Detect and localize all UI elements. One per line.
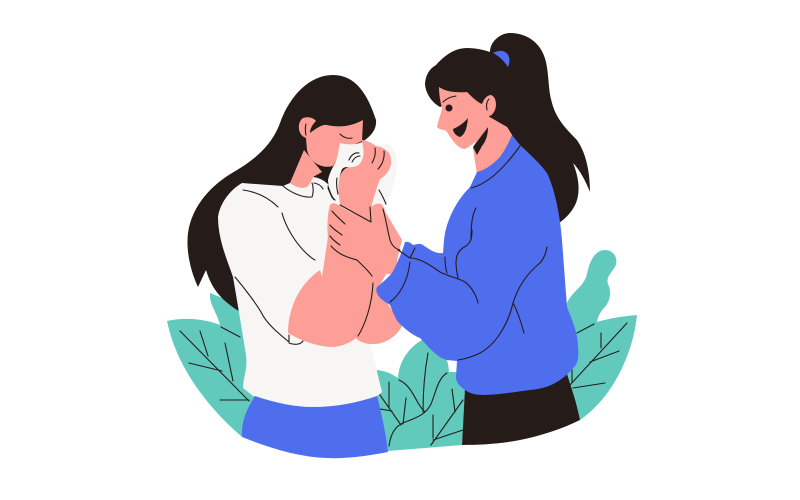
neck: friend: [473, 116, 512, 175]
blue sweater: [376, 135, 578, 395]
tissue front: [328, 142, 364, 200]
hand and tissue lines: [328, 148, 386, 204]
hair: crying woman: [187, 75, 376, 320]
under-chin shadow: [305, 145, 336, 182]
comforting friend: [376, 33, 590, 445]
face: friend: [437, 87, 496, 149]
sweater creases: [235, 183, 335, 344]
pink elbow behind: [355, 280, 402, 344]
sweater fold lines: [390, 146, 547, 360]
neck: crying woman: [290, 150, 322, 188]
white sweater: [218, 177, 382, 407]
tissue back: [370, 143, 397, 208]
foliage: teal leaves behind the figures: [167, 250, 637, 451]
face: crying woman: [299, 117, 363, 167]
hair: friend: [425, 33, 590, 223]
eye, brow and ear line: [446, 104, 452, 112]
leaf veins: [180, 323, 627, 446]
comforting hand: [327, 203, 402, 275]
closed eye and ear lines: [305, 124, 352, 138]
mouth: [453, 118, 468, 137]
crying woman: [187, 75, 402, 458]
comforting hand lines: [330, 205, 400, 336]
blue skirt: [242, 396, 388, 458]
raised hand: [338, 140, 391, 225]
hair tie: [493, 51, 509, 67]
pink forearm and sleeve: [288, 237, 395, 347]
blue pants: [462, 374, 580, 445]
under-chin shadow: [473, 127, 488, 155]
